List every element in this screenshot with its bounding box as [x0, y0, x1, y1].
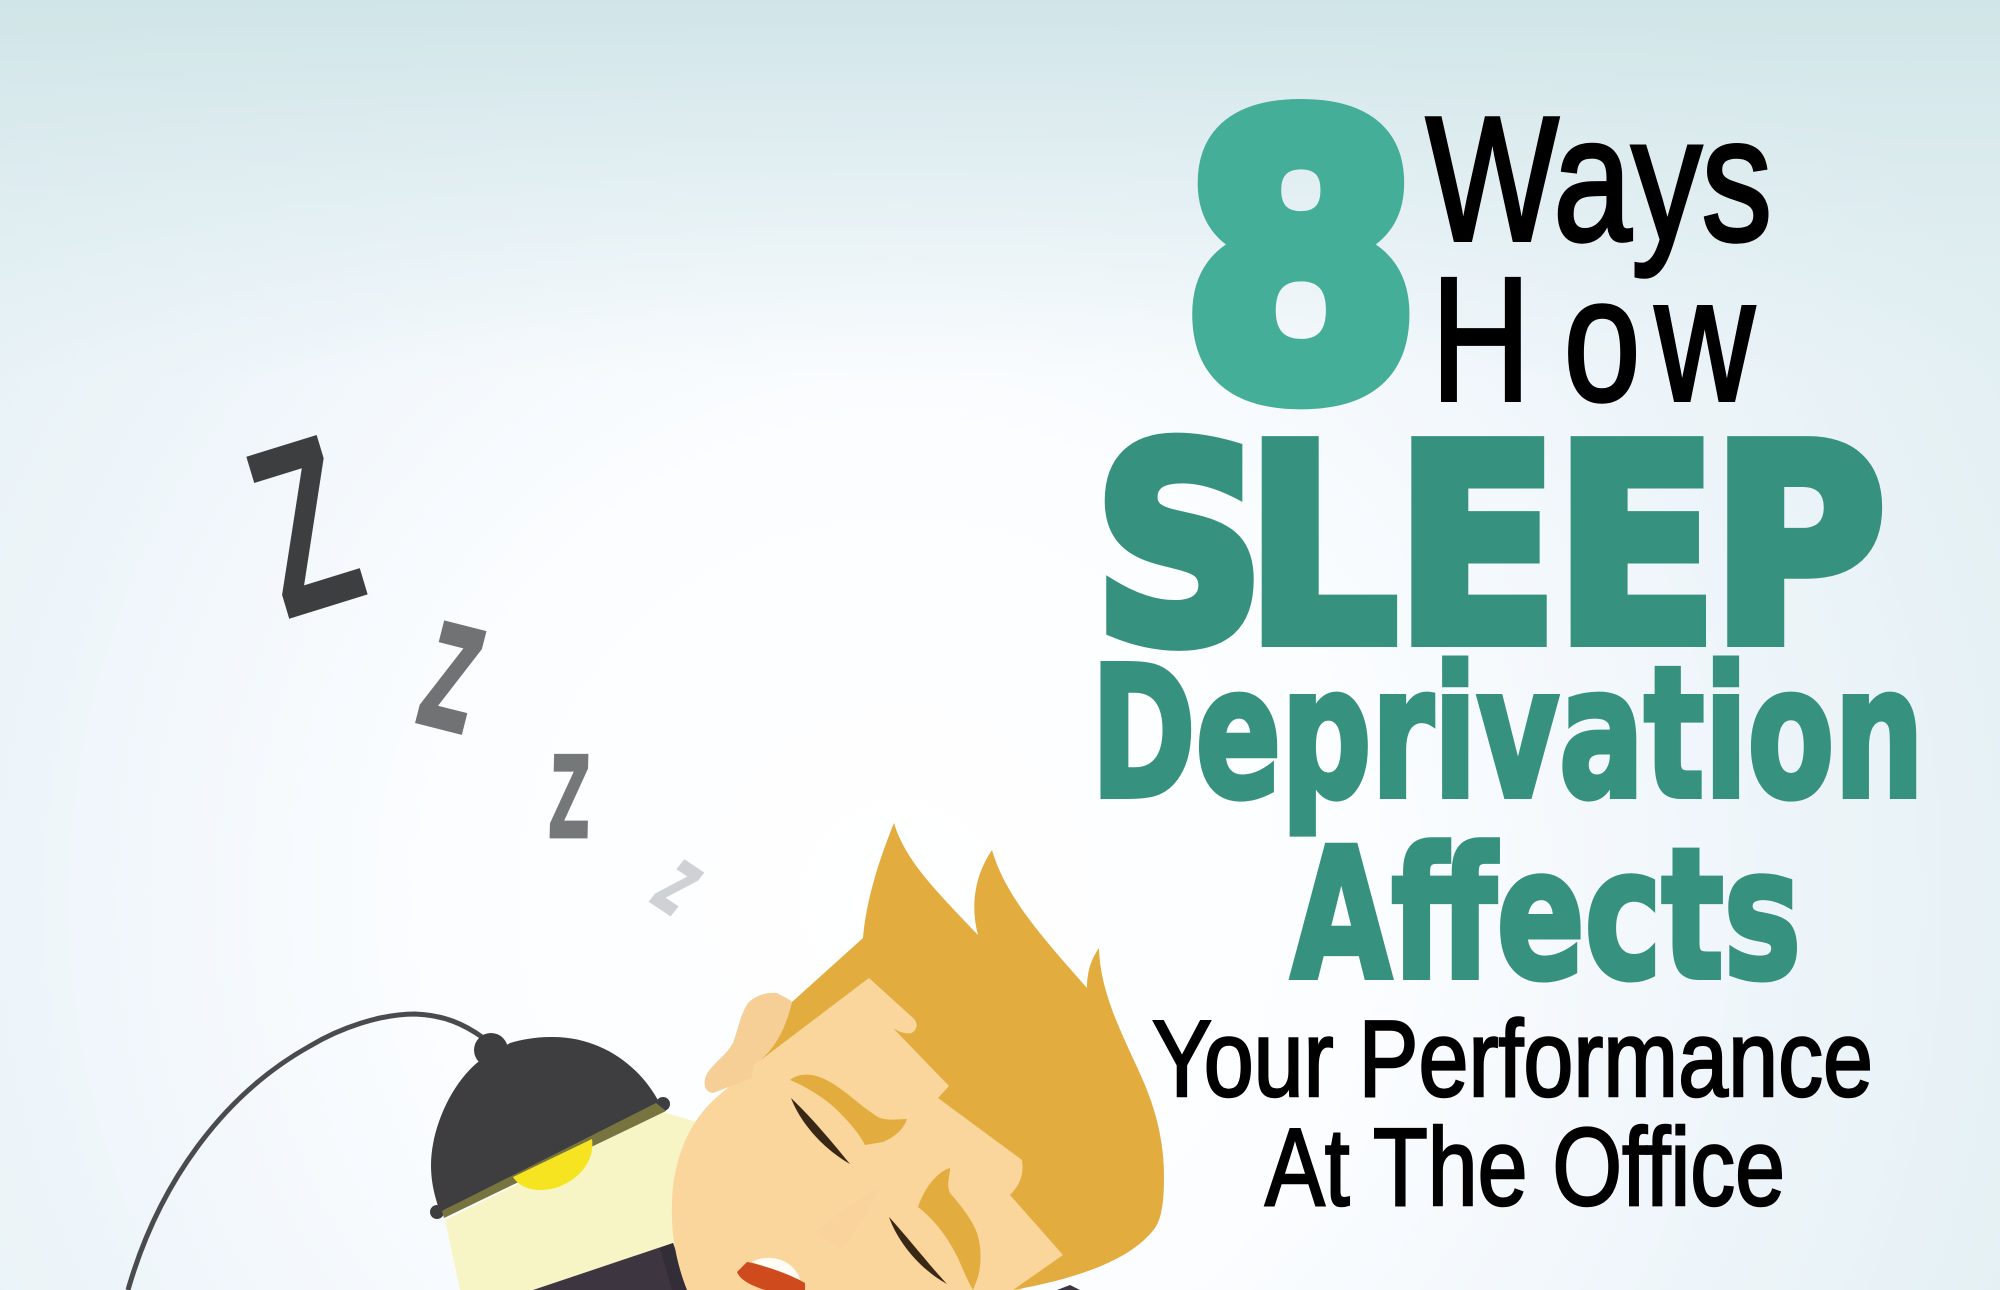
eyebrow: upper [790, 1075, 907, 1145]
word: Affects: Affects [1291, 811, 1801, 1020]
small light Z: Z [640, 847, 714, 927]
ear [705, 993, 792, 1093]
third grey Z: Z [548, 731, 591, 861]
sleeping Z letters [221, 382, 714, 927]
big numeral 8: 8 [1183, 43, 1419, 480]
illustration: man asleep under a desk lamp [128, 823, 1164, 1290]
face [672, 978, 1080, 1290]
line: At The Office: At The Office [1265, 1106, 1785, 1229]
word: How: How [1431, 242, 1755, 438]
eyebrow: lower [918, 1168, 981, 1290]
light bulb [513, 1139, 592, 1190]
suit shoulder [533, 1243, 690, 1290]
teeth [752, 1258, 800, 1282]
light beam [445, 1112, 700, 1290]
hair [753, 823, 1164, 1290]
nose shading [813, 1187, 880, 1250]
second grey Z: Z [407, 593, 495, 763]
collar hint [1057, 1285, 1080, 1290]
closed eye: upper [791, 1098, 850, 1164]
closed eye: lower [889, 1217, 947, 1284]
title [1091, 43, 1924, 1229]
word: Ways: Ways [1426, 80, 1772, 278]
large dark Z: Z [221, 382, 387, 670]
word: SLEEP: SLEEP [1094, 389, 1886, 704]
icon: lamp shade [430, 1033, 670, 1219]
mouth [737, 1262, 805, 1290]
icon: lamp cord [128, 1014, 482, 1290]
